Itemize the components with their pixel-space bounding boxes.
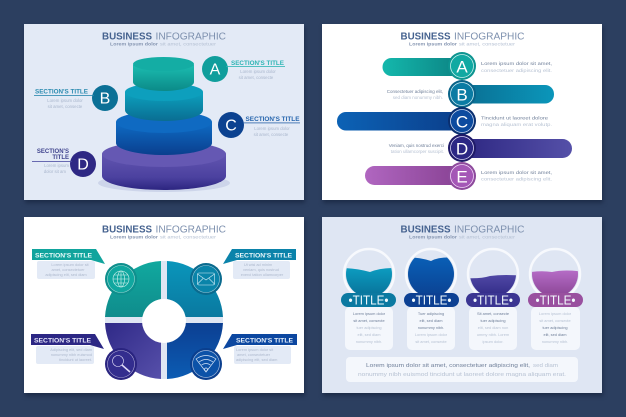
heading: panel 1 title: INFOGRAPHIC (156, 32, 226, 42)
cylinder B (125, 83, 203, 121)
icon: globe (105, 263, 137, 295)
column 1: •TITLE• (348, 294, 388, 308)
callout: bottom-right banner: SECTION'S TITLE (236, 338, 293, 344)
bottom text box (346, 357, 578, 382)
callout B: sit amet, consecte (48, 104, 83, 109)
callout A (202, 56, 285, 82)
bar A: A (456, 58, 468, 76)
callout D: SECTION'S (37, 149, 69, 155)
heading: panel 1 title: BUSINESS (102, 32, 152, 42)
callout B: Lorem ipsum dolor (47, 98, 83, 103)
cylinder D (102, 141, 226, 190)
icon: wifi (190, 348, 222, 380)
bar captions: magna aliquam erat volutp. (481, 122, 552, 127)
callout: top-left banner: amet, consectetuer (51, 267, 85, 272)
heading: panel 3 title: sit amet, consectetuer (160, 234, 217, 240)
heading: panel 3 title: Lorem ipsum dolor (110, 234, 158, 240)
column 2: Lorem ipsum dolor (415, 332, 448, 337)
column 1: sit amet, consecte (353, 318, 385, 323)
column 4 (525, 249, 585, 350)
quadrant top-left (105, 261, 161, 317)
callout: bottom-right banner (223, 334, 297, 364)
callout C: SECTION'S TITLE (246, 117, 300, 123)
bottom text box: Lorem ipsum dolor sit amet, consectetuer adipiscing elit, (366, 363, 530, 369)
heading: panel 3 title: BUSINESS (102, 224, 152, 236)
heading: panel 2 title (400, 32, 524, 46)
column 3: ummy nibh. Lorem (477, 332, 509, 337)
column 4: •TITLE• (536, 294, 576, 308)
bar E (365, 162, 476, 190)
column 2 (400, 249, 460, 350)
bar captions: consectetuer adipiscing elit. (481, 68, 552, 73)
column 2: elit, sed diam (420, 318, 442, 323)
callout: top-left banner: SECTION'S TITLE (35, 252, 92, 260)
callout A: Lorem ipsum dolor (240, 69, 276, 74)
bar captions: sed diam nonummy nibh. (393, 95, 443, 100)
bar captions: Tincidunt ut laoreet dolore (481, 116, 549, 120)
callout D (32, 149, 96, 177)
callout: bottom-left banner: tincidunt ut laoreet. (59, 357, 92, 362)
panel: horizontal bars (322, 24, 603, 203)
heading: panel 3 title (102, 224, 226, 240)
column 4: nonummy nibh. (542, 339, 568, 344)
callout B (34, 85, 118, 111)
bar captions: tation ullamcorper suscipit. (391, 149, 444, 154)
callout: bottom-right banner: Lorem ipsum dolor sit (236, 347, 274, 352)
column 4: sit amet, consecte (539, 318, 571, 323)
bar C: C (456, 112, 468, 132)
callout C: C (225, 118, 237, 134)
heading: panel 4 title: INFOGRAPHIC (454, 224, 524, 236)
icon: envelope (190, 263, 222, 295)
callout D: D (77, 156, 89, 174)
bar B: B (456, 86, 468, 104)
bar E: E (456, 168, 468, 186)
bar captions: consectetuer adipiscing elit. (481, 176, 552, 182)
callout: bottom-left banner (31, 334, 104, 364)
callout A: A (210, 62, 221, 78)
callout: top-right banner: SECTION'S TITLE (235, 252, 292, 260)
callout C: sit amet, consecte (254, 132, 289, 137)
column 3: •TITLE• (473, 294, 513, 308)
callout A: sit amet, consecte (239, 75, 274, 80)
bar D: D (456, 140, 468, 158)
panel: stacked cylinders (24, 24, 305, 203)
callout: bottom-right banner: adipiscing elit, sed diam (236, 357, 277, 362)
column 1: tuer adipiscing (356, 325, 382, 330)
column 1 (340, 249, 396, 350)
heading: panel 2 title: INFOGRAPHIC (454, 32, 524, 42)
column 2: nonummy nibh. (418, 325, 444, 330)
callout: top-right banner: Ut wisi ad minim (244, 262, 272, 267)
heading: panel 3 title: INFOGRAPHIC (156, 224, 226, 236)
bar D (448, 134, 572, 162)
callout: bottom-left banner: SECTION'S TITLE (34, 338, 91, 344)
bar B (448, 80, 554, 108)
callout A: SECTION'S TITLE (231, 61, 284, 67)
bar captions (387, 61, 552, 182)
callout B: SECTION'S TITLE (35, 90, 88, 96)
column 2: sit amet, consecte (415, 339, 447, 344)
column 3: tuer adipiscing (480, 318, 506, 323)
column 1: elit, sed diam (358, 332, 380, 337)
bar C (337, 107, 476, 135)
callout C (218, 112, 300, 138)
column 3: Sit amet, consecte (477, 311, 509, 316)
heading: panel 4 title: sit amet, consectetuer (459, 234, 516, 240)
callout: top-right banner: veniam, quis nostrud (243, 267, 279, 272)
heading: panel 4 title: BUSINESS (400, 224, 451, 236)
column 2: •TITLE• (412, 294, 452, 308)
bar captions: Veniam, quis nostrud exerci (389, 143, 444, 148)
column 3: ipsum dolor. (483, 339, 503, 344)
panel: donut quadrants (24, 217, 305, 396)
panel: liquid circles (322, 217, 603, 396)
heading: panel 2 title: Lorem ipsum dolor (409, 42, 457, 46)
bar captions: Consectetuer adipiscing elit, (387, 89, 443, 94)
callout: top-left banner: adipiscing elit, sed diam (45, 272, 87, 277)
column 2: Tuer adipiscing (418, 311, 444, 316)
callout B: B (100, 90, 110, 108)
callout: top-right banner (223, 249, 296, 279)
column 1: nonummy nibh. (356, 339, 382, 344)
column 3: elit, sed diam non (478, 325, 508, 330)
callout: top-left banner: Lorem ipsum dolor sit (51, 262, 90, 267)
callout C: Lorem ipsum dolor (254, 126, 290, 131)
heading: panel 1 title: sit amet, consectetuer (160, 42, 217, 46)
column 4: elit, sed diam (544, 332, 566, 337)
heading: panel 4 title (400, 224, 524, 240)
column 4: tuer adipiscing (542, 325, 568, 330)
heading: panel 1 title: Lorem ipsum dolor (110, 42, 158, 46)
callout: bottom-right banner: amet, consectetuer (237, 352, 271, 357)
bar A (382, 52, 476, 80)
heading: panel 2 title: sit amet, consectetuer (459, 42, 516, 46)
icon: magnifier (105, 348, 137, 380)
quadrant bottom-left (105, 323, 161, 379)
heading: panel 4 title: Lorem ipsum dolor (409, 234, 457, 240)
cylinder C (116, 111, 212, 155)
callout: bottom-left banner: Adipiscing elit, sed diam (50, 347, 92, 352)
quadrant bottom-right (167, 323, 223, 379)
chart: donut (105, 261, 223, 379)
bar captions: Lorem ipsum dolor sit amet, (481, 61, 552, 66)
chart: stacked cylinders (98, 57, 230, 192)
callout: top-left banner (32, 249, 105, 279)
heading: panel 1 title (102, 32, 226, 46)
bottom text box: sed diam (533, 363, 558, 369)
column 4: Lorem ipsum dolor (539, 311, 572, 316)
callout D: Lorem ipsum (44, 163, 69, 168)
bar captions: Lorem ipsum dolor sit amet, (481, 170, 552, 175)
callout: top-right banner: exerci tation ullamcorper (241, 272, 284, 277)
quadrant top-right (167, 261, 223, 317)
callout: bottom-left banner: nonummy nibh euismod (51, 352, 92, 357)
heading: panel 2 title: BUSINESS (400, 32, 451, 42)
callout D: TITLE (52, 155, 69, 161)
column 1: Lorem ipsum dolor (353, 311, 386, 316)
column 3 (465, 249, 525, 350)
bottom text box: nonummy nibh euismod tincidunt ut laoreet dolore magna aliquam erat. (358, 372, 566, 378)
cylinder A (133, 57, 194, 91)
callout D: dolor sit am (44, 169, 66, 174)
